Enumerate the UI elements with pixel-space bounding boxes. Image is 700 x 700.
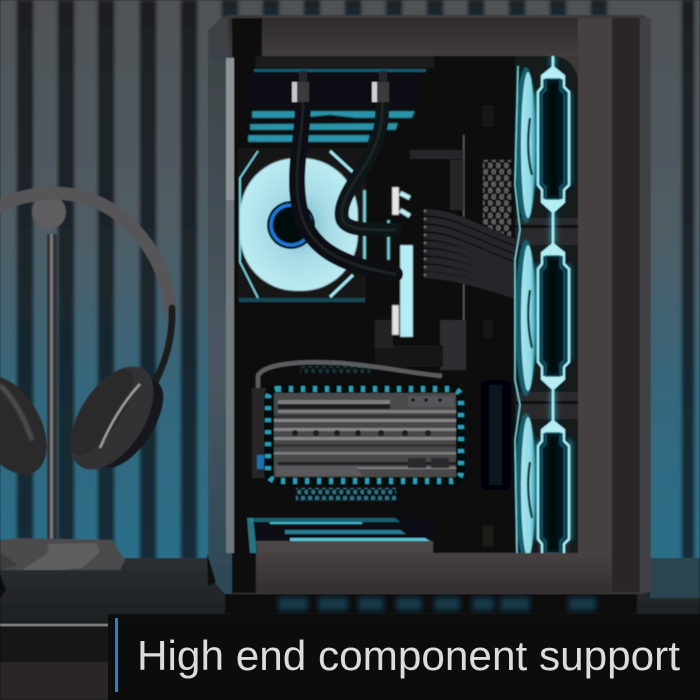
side glass panel (208, 17, 232, 594)
gpu screws (292, 430, 431, 436)
gpu dark frame (264, 385, 465, 485)
caption text: High end component support (137, 632, 680, 679)
radiator teal line (254, 69, 426, 72)
radiator fan (250, 72, 420, 106)
headphone stand (0, 195, 125, 570)
fan hub with blue ring (267, 201, 315, 249)
gpu dashed light ring (268, 389, 461, 481)
front LED module top (538, 67, 569, 212)
psu shroud with lights (247, 517, 436, 553)
vertical white lighting (363, 187, 413, 337)
interior (233, 56, 578, 553)
stand pole (47, 234, 57, 540)
motherboard bracket (375, 135, 466, 370)
stand knob (32, 195, 66, 229)
hex mesh (483, 160, 511, 236)
graphics card (252, 385, 465, 485)
front fans (521, 72, 535, 557)
radiator top block (256, 56, 434, 68)
rear fan glow blades (240, 158, 358, 291)
gpu power cable (258, 362, 442, 388)
right edge (640, 18, 651, 592)
accent bar (115, 618, 118, 692)
gpu brand plate (276, 466, 362, 476)
hex vent below gpu (296, 488, 396, 501)
headband (0, 193, 172, 392)
case feet and underglow (225, 594, 637, 614)
gpu io ports (408, 396, 454, 468)
right cable bay (472, 105, 515, 548)
top bar (228, 18, 612, 56)
rear fan frame (238, 148, 366, 302)
desk (0, 558, 700, 700)
cable bundle (424, 208, 520, 300)
front glass junctions (516, 218, 578, 553)
hex vent above gpu (300, 366, 370, 374)
front fan column backing (515, 56, 578, 553)
right ear cup (54, 352, 177, 484)
front LED stems (552, 55, 554, 422)
glass pillar highlight (226, 58, 234, 553)
front fan edge lines (515, 66, 520, 553)
front LED glow (538, 56, 569, 540)
gpu fins (274, 393, 456, 477)
desk shadow objects (0, 553, 216, 598)
radiator fins (248, 111, 415, 142)
right strip of frame (578, 18, 612, 590)
pc case (208, 15, 651, 614)
tube fittings (292, 71, 389, 102)
caption background (108, 614, 700, 700)
interior components (238, 55, 578, 561)
bottom bar (232, 553, 612, 593)
coolant tubes (297, 100, 395, 274)
front LED modules middle and bottom (538, 244, 569, 566)
left ear cup (0, 362, 63, 488)
headphones (0, 193, 177, 488)
caption banner (108, 614, 700, 700)
right pillar (612, 18, 640, 592)
front frame (222, 15, 651, 594)
wall: slatted background (0, 0, 700, 560)
front fan teal glow (515, 67, 537, 561)
stand base (0, 538, 125, 570)
gpu left bracket (252, 388, 266, 478)
